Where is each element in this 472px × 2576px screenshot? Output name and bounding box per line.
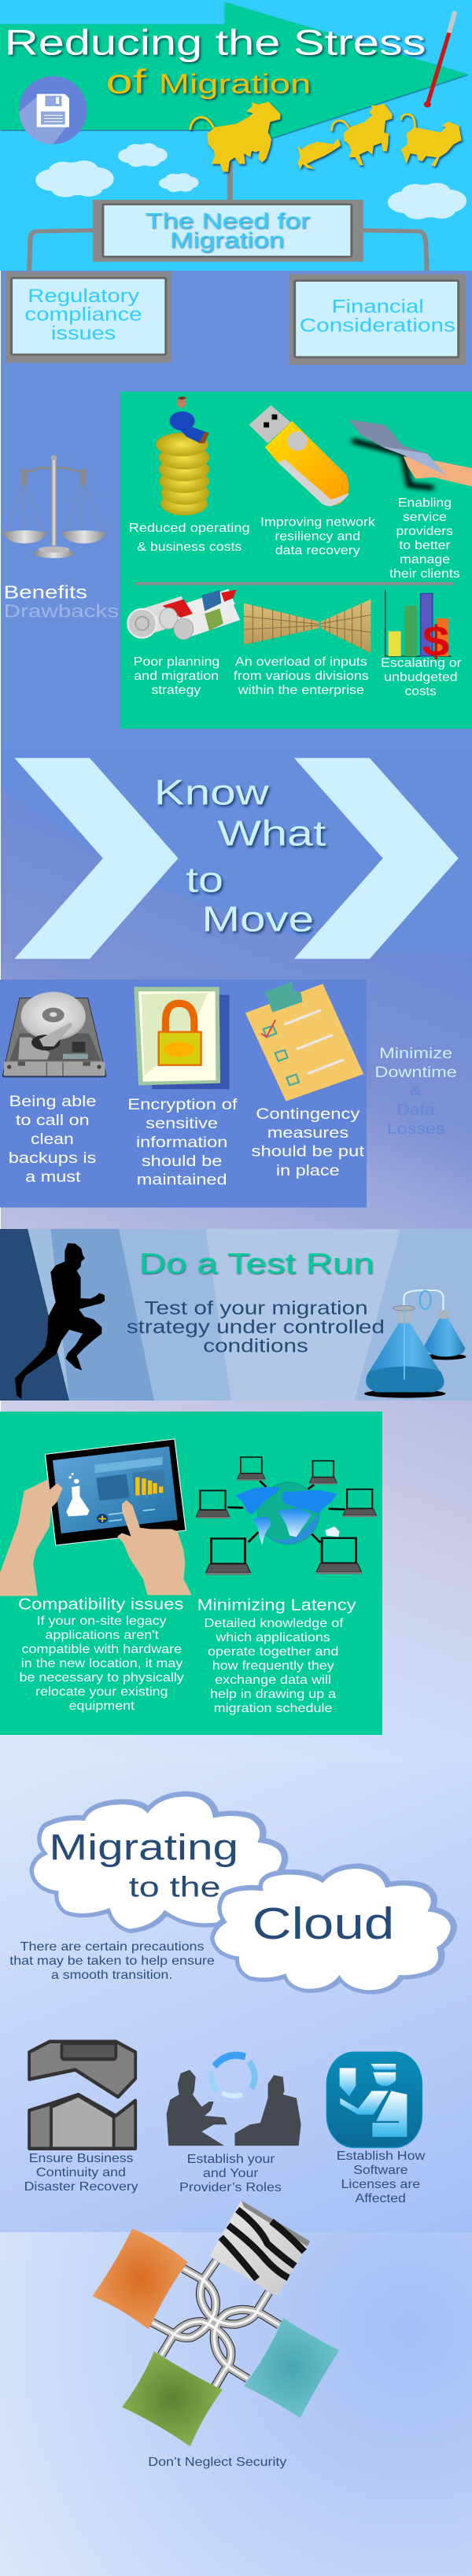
text: contingency: Contingency	[256, 1106, 360, 1123]
section: cloud precautions	[24, 2042, 426, 2469]
section: migrating to the cloud	[9, 1796, 452, 1990]
panel: green benefits and drawbacks	[120, 392, 472, 729]
text: contingency: measures	[267, 1125, 348, 1142]
heading: know what to move: What	[217, 813, 326, 853]
text: provider roles: Provider’s Roles	[179, 2181, 282, 2194]
text: business continuity: Disaster Recovery	[24, 2180, 138, 2194]
connector stem	[227, 163, 233, 200]
text: compatibility issues: in the new location, it may	[21, 1657, 183, 1670]
icon: coin stack with person	[156, 397, 209, 515]
chart: rising costs bars: $	[422, 617, 449, 666]
icon: encrypted document padlock	[134, 987, 230, 1089]
chevron right	[294, 758, 459, 959]
text: escalating costs: Escalating or	[381, 657, 462, 670]
heading: know what to move	[154, 773, 326, 939]
icon: tablet held in hands	[0, 1439, 192, 1596]
text: escalating costs	[381, 657, 462, 698]
text: test description	[127, 1298, 385, 1356]
text: contingency	[252, 1106, 365, 1179]
icon: runner silhouette	[15, 1243, 105, 1399]
box: the need for migration	[93, 200, 363, 262]
icon: broken floppy disk	[29, 2042, 135, 2149]
text: overload of inputs: An overload of inputs	[235, 655, 367, 669]
text: enabling service providers: manage	[400, 553, 450, 566]
clouds	[35, 143, 466, 220]
heading: know what to move: to	[186, 860, 223, 900]
text: minimize downtime and data losses: Losses	[387, 1121, 445, 1138]
title	[5, 22, 426, 101]
text: provider roles	[179, 2153, 282, 2194]
box: regulatory compliance issues: issues	[51, 322, 116, 344]
text: business continuity	[24, 2152, 138, 2194]
icon: lab flasks	[364, 1290, 466, 1398]
icon: clipboard checklist	[245, 982, 363, 1102]
icon: hand with document	[349, 419, 472, 488]
text: improving network resiliency: data recovery	[275, 544, 360, 557]
icon: balance scale	[2, 455, 106, 558]
background: white edge	[0, 271, 1, 1412]
text: overload of inputs	[234, 655, 369, 697]
text: enabling service providers: service	[403, 511, 447, 524]
text: contingency: should be put	[252, 1144, 365, 1161]
box: regulatory compliance issues: Regulatory	[28, 285, 140, 307]
text: encryption: should be	[142, 1153, 222, 1170]
text: minimize downtime and data losses: Minimize	[379, 1046, 452, 1062]
text: improving network resiliency: resiliency and	[275, 530, 360, 543]
text: escalating costs: unbudgeted	[384, 671, 458, 684]
text: software licenses: Licenses are	[341, 2178, 420, 2191]
text: minimizing latency: how frequently they	[212, 1659, 335, 1673]
text: benefits / drawbacks	[4, 582, 119, 622]
section: compatibility and latency	[0, 1412, 382, 1735]
green arrow banner	[0, 2, 468, 138]
icon: hard disk	[2, 992, 106, 1077]
icon: four interlinked padlocks	[92, 2201, 339, 2446]
text: compatibility issues: be necessary to physically	[19, 1671, 185, 1685]
text: precautions intro	[9, 1940, 215, 1982]
box: financial considerations: Financial	[332, 295, 424, 317]
text: contingency: in place	[276, 1163, 340, 1179]
text: test description: conditions	[203, 1336, 308, 1356]
text: encryption: maintained	[137, 1172, 227, 1189]
text: clean backups: clean	[31, 1131, 74, 1148]
text: software licenses	[337, 2150, 426, 2205]
icon: goat	[297, 138, 341, 169]
title: Migration	[159, 68, 311, 99]
text: overload of inputs: from various divisions	[234, 670, 369, 683]
icon: file cabinets in perspective	[244, 600, 371, 653]
box: financial considerations: Considerations	[300, 314, 455, 336]
text: benefits / drawbacks: Benefits	[4, 582, 87, 603]
title: Reducing the Stress	[5, 22, 426, 63]
icon: floppy disk	[18, 76, 87, 145]
text: poor planning	[134, 655, 219, 697]
icon: usb drive	[249, 405, 349, 506]
background: light lower	[0, 1762, 472, 2232]
text: poor planning: strategy	[151, 684, 201, 697]
text: precautions intro: There are certain precautions	[20, 1940, 204, 1954]
text: benefits / drawbacks: Drawbacks	[4, 601, 119, 622]
icon: two people and cycle arrows	[167, 2055, 301, 2146]
text: clean backups	[9, 1094, 96, 1186]
chevron left	[14, 758, 179, 959]
text: minimize downtime and data losses: Data	[396, 1102, 435, 1119]
icon: thermometer	[424, 13, 455, 108]
text: minimize downtime and data losses	[374, 1046, 457, 1138]
heading: know what to move: Know	[154, 773, 269, 813]
text: software licenses: Affected	[356, 2192, 406, 2205]
text: compatibility issues: equipment	[69, 1699, 135, 1713]
text: compatibility issues: If your on-site legacy	[37, 1615, 167, 1628]
text: provider roles: and Your	[203, 2167, 258, 2180]
icon: software license officer	[326, 2052, 422, 2147]
banner background bands	[0, 1229, 472, 1401]
blue panel behind boxes	[1, 271, 472, 378]
text: precautions intro: that may be taken to help ensure	[9, 1954, 215, 1968]
background: radial bottom	[0, 2232, 472, 2576]
background: blue upper	[0, 271, 472, 790]
text: minimizing latency	[197, 1596, 357, 1715]
text: test description: Test of your migration	[145, 1298, 368, 1319]
panel: green compatibility and latency	[0, 1412, 382, 1735]
text: escalating costs: costs	[405, 685, 437, 698]
text: business continuity: Ensure Business	[29, 2152, 134, 2166]
section: do a test run	[0, 1229, 472, 1401]
text: compatibility issues: applications aren't	[45, 1629, 159, 1642]
text: encryption: sensitive	[146, 1116, 218, 1132]
text: compatibility issues	[18, 1595, 185, 1713]
text: reduced costs: Reduced operating	[129, 522, 250, 535]
box: the need for migration: Migration	[170, 228, 285, 253]
text: software licenses: Software	[353, 2164, 407, 2177]
text: reduced costs: & business costs	[137, 541, 242, 554]
section: header and need for migration	[0, 2, 472, 378]
cloud: cloud	[214, 1868, 452, 1990]
icon: second cow	[332, 104, 393, 165]
icon: rolled plans	[127, 589, 236, 640]
section: benefits and drawbacks	[2, 392, 472, 729]
text: enabling service providers: their clients	[389, 567, 460, 581]
text: encryption: Encryption of	[127, 1097, 238, 1113]
icon: third cow	[401, 114, 462, 167]
heading: know what to move: Move	[201, 899, 314, 939]
text: software licenses: Establish How	[337, 2150, 426, 2163]
panel: minimize downtime tips	[0, 980, 367, 1208]
text: minimizing latency: exchange data will	[215, 1674, 331, 1687]
text: overload of inputs: within the enterprise	[238, 684, 364, 697]
text: minimizing latency: Detailed knowledge of	[204, 1617, 344, 1630]
box: regulatory compliance issues	[6, 271, 171, 363]
box: the need for migration: The Need for	[146, 209, 310, 233]
title: of	[106, 62, 147, 101]
text: clean backups: a must	[25, 1169, 81, 1186]
chart: rising costs bars	[385, 590, 452, 666]
text: precautions intro: a smooth transition.	[51, 1969, 172, 1982]
cloud: migrating to the	[34, 1796, 282, 1929]
text: compatibility issues: relocate your existing	[35, 1685, 168, 1699]
text: compatibility issues: compatible with hardware	[22, 1643, 182, 1656]
icon: migrating herd	[190, 101, 462, 172]
text: enabling service providers: providers	[396, 525, 453, 538]
box: regulatory compliance issues: compliance	[24, 303, 142, 325]
icon: globe with connected laptops	[196, 1457, 376, 1575]
text: enabling service providers: to better	[399, 539, 451, 552]
text: reduced costs	[129, 522, 250, 554]
box: financial considerations	[289, 274, 466, 365]
text: minimizing latency: help in drawing up a	[210, 1688, 337, 1701]
text: minimizing latency: Minimizing Latency	[197, 1596, 357, 1614]
section: know what to move	[0, 747, 472, 1208]
text: encryption	[127, 1097, 238, 1189]
text: encryption: information	[136, 1135, 227, 1151]
cloud: migrating to the: Migrating	[49, 1827, 238, 1868]
text: minimize downtime and data losses: &	[410, 1083, 422, 1100]
text: enabling service providers: Enabling	[398, 496, 452, 510]
background: gradient middle	[0, 787, 472, 1766]
text: improving network resiliency: Improving network	[260, 515, 376, 529]
text: minimizing latency: migration schedule	[214, 1702, 332, 1715]
text: security: Don’t Neglect Security	[148, 2456, 287, 2469]
text: minimize downtime and data losses: Downtime	[374, 1065, 457, 1081]
text: test description: strategy under controlled	[127, 1317, 385, 1338]
cloud: migrating to the: to the	[129, 1872, 220, 1903]
icon: leading cow	[190, 101, 281, 172]
cloud: cloud: Cloud	[253, 1899, 394, 1948]
text: clean backups: backups is	[9, 1150, 96, 1167]
text: minimizing latency: operate together and	[208, 1645, 338, 1659]
text: poor planning: Poor planning	[134, 655, 219, 669]
heading: do a test run: Do a Test Run	[139, 1248, 374, 1280]
text: enabling service providers	[389, 496, 460, 581]
text: compatibility issues: Compatibility issues	[18, 1595, 183, 1613]
text: provider roles: Establish your	[187, 2153, 275, 2166]
text: clean backups: Being able	[9, 1094, 96, 1110]
text: improving network resiliency	[260, 515, 376, 557]
background diagonal band	[1, 747, 472, 952]
text: minimizing latency: which applications	[215, 1631, 330, 1644]
background: sky	[0, 0, 472, 271]
text: poor planning: and migration	[134, 670, 219, 683]
text: clean backups: to call on	[16, 1113, 90, 1129]
connector lines	[29, 231, 427, 271]
text: business continuity: Continuity and	[36, 2166, 126, 2180]
